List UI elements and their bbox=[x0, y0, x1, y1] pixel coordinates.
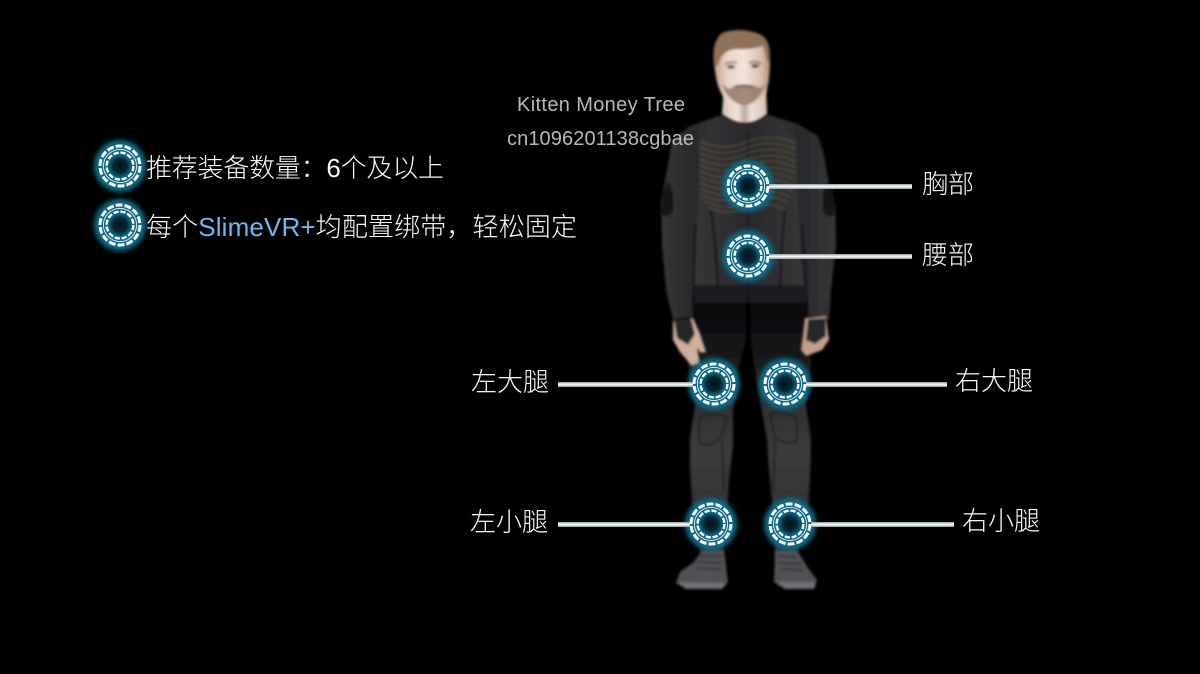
label: chest: 胸部 bbox=[922, 169, 974, 199]
watermark: Kitten Money Tree bbox=[517, 94, 685, 116]
label: left thigh: 左大腿 bbox=[471, 367, 549, 397]
neck bbox=[722, 88, 767, 123]
person wearing motion capture suit bbox=[661, 30, 836, 589]
label: waist: 腰部 bbox=[922, 240, 974, 270]
sensor ring: chest bbox=[722, 160, 774, 212]
watermark bbox=[507, 94, 694, 150]
legend text: recommended quantity: 推荐装备数量：6个及以上 bbox=[146, 153, 444, 183]
sensor ring: right thigh bbox=[759, 358, 811, 410]
sensor ring: left thigh bbox=[688, 358, 740, 410]
label: right thigh: 右大腿 bbox=[955, 366, 1033, 396]
shoes bbox=[676, 550, 817, 589]
legend text: straps: 每个SlimeVR+均配置绑带，轻松固定 bbox=[146, 212, 577, 242]
legs bbox=[688, 298, 811, 552]
torso and arms bbox=[661, 115, 836, 320]
label: right calf: 右小腿 bbox=[962, 506, 1040, 536]
legend icon: ring 2 bbox=[94, 199, 146, 251]
sensor ring: waist bbox=[722, 230, 774, 282]
legend icon: ring 1 bbox=[94, 140, 146, 192]
label: left calf: 左小腿 bbox=[470, 507, 548, 537]
head bbox=[713, 30, 770, 106]
sensor ring: left calf bbox=[685, 498, 737, 550]
hands bbox=[673, 316, 829, 366]
watermark: cn1096201138cgbae bbox=[507, 128, 694, 150]
connector lines bbox=[558, 184, 954, 527]
chest sensor pattern bbox=[700, 137, 795, 212]
sensor ring: right calf bbox=[764, 498, 816, 550]
